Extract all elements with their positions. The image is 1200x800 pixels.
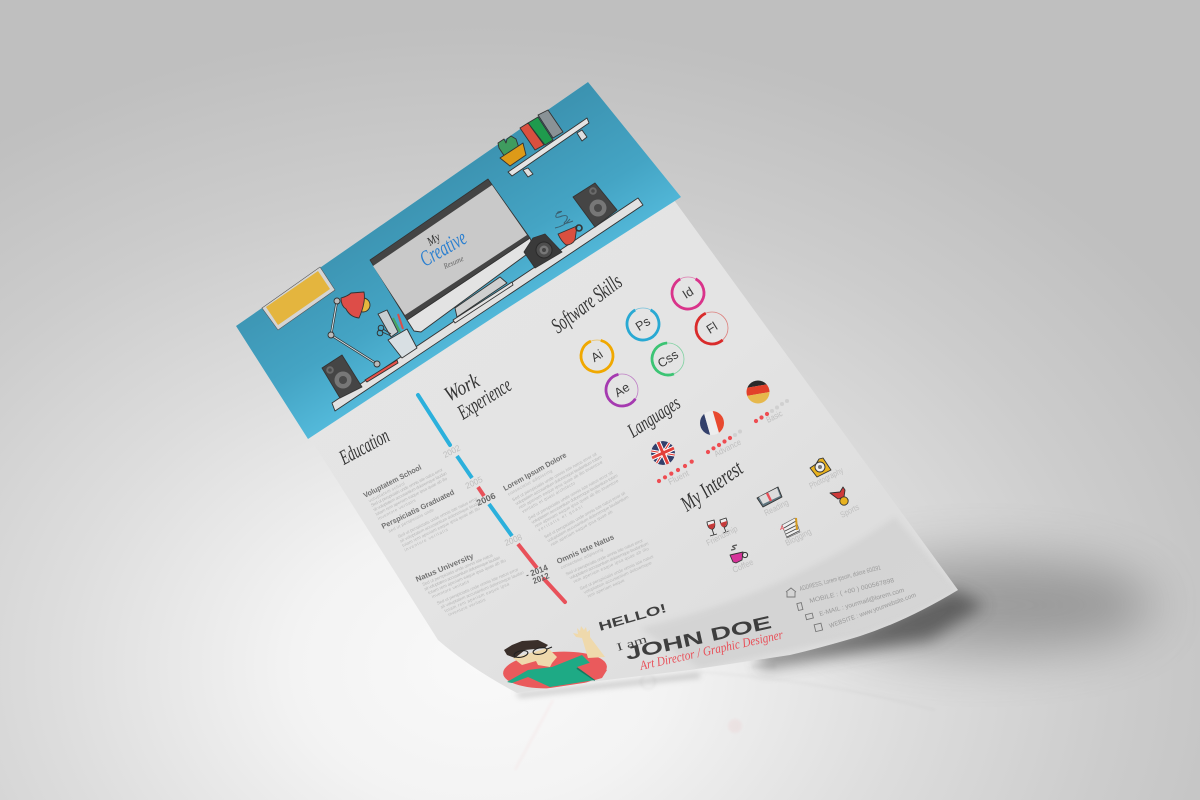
work: lorem ipsum dolore: voluptatem accusantium doloremque laudantium [546,494,630,543]
skill: Css: Css [655,347,681,371]
skill: Css [647,338,689,380]
timeline years: 2006 [475,490,497,508]
skill: Ae [600,368,644,412]
timeline years [441,443,551,586]
skill: Fl: Fl [704,319,720,337]
work: omnis iste natus: Omnis Iste Natus [555,532,615,566]
interest: blogging [780,518,813,548]
job title: Art Director / Graphic Designer [638,627,785,673]
work: lorem ipsum dolore: consectetur adipiscing [507,468,553,497]
I am label: I am [615,633,649,654]
work: lorem ipsum dolore: rem aperiam eaque ipsa quae ab [550,509,614,547]
education: natus university: sit voluptatem accusantium doloremque laudan [423,555,501,591]
education: natus university: inventore veritatis [447,597,487,617]
skill dots: fluent [657,460,694,483]
language: German: Basic [764,408,785,425]
interest: photography: Photography [807,465,845,491]
skill dots: advance [706,430,742,454]
education: natus university: inventore veritatis [431,579,471,599]
paper fold shading [640,517,958,668]
work: omnis iste natus: voluptatem accusantium doloremque [583,560,653,595]
work: omnis iste natus [555,520,659,604]
education: voluptatem school: Voluptatem School [362,463,423,500]
yellow picture frame [262,267,335,330]
timeline years: 2005 [464,474,484,491]
work: omnis iste natus: Sed ut perspiciatis unde omnis iste natus error [565,538,644,576]
contact icons [786,588,823,632]
interest: reading [757,487,790,518]
software skill rings [577,271,735,412]
education: voluptatem school: Sed ut perspiciatis unde omnis iste natus error [370,467,444,508]
contact details: MOBILE : ( +00 ) 000567898 [809,577,895,605]
contact details [786,564,917,632]
education: natus university: Natus University [414,551,476,584]
monitor [370,179,534,332]
timeline years: - 2014 [524,562,549,580]
interest: friendship wine glasses: Friendship [704,523,739,548]
desk lamp [328,292,398,382]
interest: blogging: Blogging [783,526,813,548]
language: French [700,411,742,457]
books [520,110,563,150]
education: natus university: totam rem aperiam eaque ipsa quae ab illo [427,558,507,595]
education: perspiciatis graduated: sed ut perspiciatis unde [387,507,435,534]
wall shelf [508,118,589,177]
heading: languages: Languages [623,392,684,443]
education: voluptatem school: totam rem aperiam eaque ipsa quae ab illo [374,476,449,517]
coffee cup [555,211,582,245]
interest: sports medal [830,487,861,520]
heading: education: Education [335,423,393,470]
heading: my interest: My Interest [675,455,748,516]
work: lorem ipsum dolore: voluptatem accusantium doloremque laudantium totam [514,454,603,506]
work: omnis iste natus: consectetur adipiscing [560,546,604,570]
greeting: HELLO! [597,601,668,634]
work: lorem ipsum dolore: rem aperiam eaque ipsa quae ab illo inventore [534,478,620,529]
education: voluptatem school: inventore veritatis [377,497,417,521]
pen holder, ruler, scissors [377,310,417,358]
camera [524,234,562,268]
flag: France [700,411,724,435]
education: voluptatem school: voluptatem school [368,481,406,503]
work: lorem ipsum dolore [502,433,633,554]
work: lorem ipsum dolore: rem aperiam eaque ipsa quae ab illo inventore [518,459,604,510]
language: English: Fluent [666,468,691,487]
skill: Id [666,271,710,315]
timeline years: 2002 [441,443,462,460]
education: natus university [414,535,529,623]
education: natus university: sit voluptatem accusantium doloremque laudan [440,570,525,610]
education: natus university: Sed ut perspiciatis unde omnis iste natus [421,552,494,587]
header: blue band [236,82,681,439]
skill: Fl [689,305,735,351]
language: English [651,441,694,485]
education: perspiciatis graduated: Perspiciatis Graduated [380,487,456,531]
flag: UK [651,441,675,465]
monitor screen title [415,225,471,271]
education: perspiciatis graduated: totam rem aperiam eaque ipsa quae ab illo [401,506,481,548]
education: voluptatem school [362,453,453,522]
education: perspiciatis graduated: Sed ut perspiciatis unde omnis iste natus error [397,496,479,539]
interest: blogging: A [780,526,785,532]
education: perspiciatis graduated [380,479,487,557]
education: perspiciatis graduated: inventore veritatis [403,527,449,552]
paper shadow [515,557,1155,698]
paper sheet [236,82,958,693]
work: lorem ipsum dolore: Sed ut perspiciatis unde omnis iste natus error sit [527,470,614,521]
name: JOHN DOE [624,612,773,664]
potted cactus [498,136,526,166]
language: French: Advance [712,437,743,459]
floor reflection [515,664,935,770]
timeline years: 2012 [531,570,551,586]
language: German [746,380,789,424]
work: lorem ipsum dolore: Sed ut perspiciatis unde omnis iste natus error sit [511,451,598,502]
work: omnis iste natus: Sed ut perspiciatis unde omnis iste natus [579,554,655,591]
right speaker [573,183,617,227]
education: natus university: Sed ut perspiciatis unde omnis iste natus error [436,567,519,606]
interest: sports medal: Sports [838,502,861,520]
interest: coffee: Coffee [731,557,755,575]
desk shelf [332,198,643,411]
work: omnis iste natus: voluptatem accusantium doloremque laudantium [569,541,650,580]
interest: coffee [730,545,755,575]
contact details: WEBSITE : www.yourwebsite.com [828,592,917,630]
skill: Ps [621,302,665,346]
work: lorem ipsum dolore: veritatis et quasi [537,504,583,533]
education: natus university: totam rem aperiam eaque ipsa [444,581,510,613]
skill: Ai: Ai [589,347,605,365]
header illustration: desk scene [262,110,643,411]
education: voluptatem school: sit voluptatem accusantium doloremque laudan [372,470,448,512]
contact details: ADDRESS, Lorem ipsum, dolore 60/291 [799,564,882,593]
work: lorem ipsum dolore: Lorem Ipsum Dolore [502,450,568,493]
work: lorem ipsum dolore: voluptatem accusantium doloremque laudantium totam [530,473,619,525]
work: lorem ipsum dolore: Sed ut perspiciatis unde omnis iste natus error sit [543,490,627,539]
work: omnis iste natus: rem aperiam eaque ipsa quae ab illo [573,546,650,584]
interest: reading: Reading [762,497,790,518]
timeline years: 2008 [503,532,524,548]
heading: work experience: Work [440,368,484,406]
heading: work experience: Experience [452,373,516,425]
heading: software skills: Software Skills [546,269,626,338]
work: omnis iste natus: rem aperiam eaque [587,577,626,599]
heading: work experience [440,368,516,425]
skill: Ae: Ae [612,380,632,400]
monitor screen title: My [423,229,443,249]
timeline [418,395,565,602]
skill dots: basic [754,399,789,423]
monitor screen title: Creative [415,225,471,271]
contact details: E-MAIL : yourmail@lorem.com [819,587,905,618]
skill: Id: Id [680,284,696,302]
flag: Germany [746,380,770,404]
skill: Ps: Ps [633,314,653,334]
skill: Ai [577,336,617,376]
left speaker [322,355,362,398]
character: waving man [502,626,608,692]
education: perspiciatis graduated: sit voluptatem accusantium doloremque laudan [399,499,483,543]
work: lorem ipsum dolore: veritatis et quasi architecto [521,480,576,514]
monitor screen title: Resume [441,254,465,271]
